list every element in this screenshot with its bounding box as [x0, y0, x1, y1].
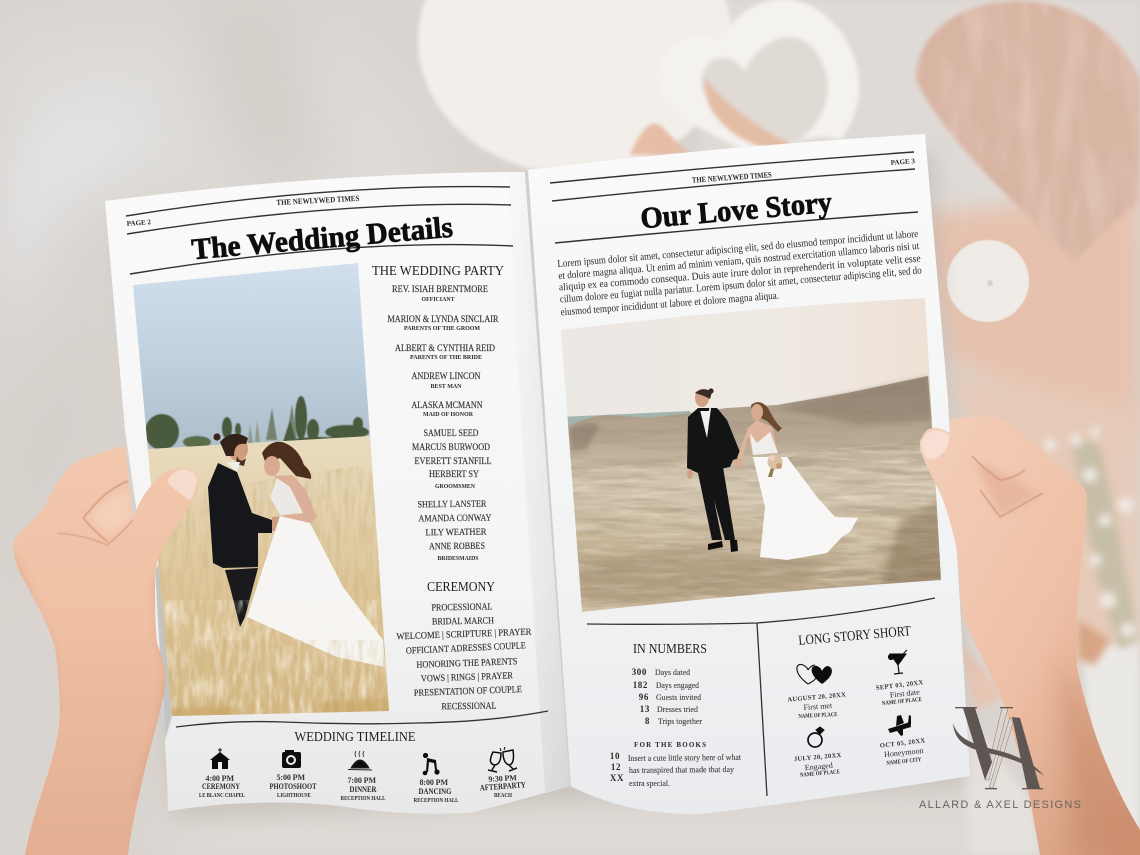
newspaper name: THE NEWLYWED TIMES [692, 170, 773, 185]
story entries: NAME OF PLACE [798, 712, 838, 720]
in numbers section: Days dated [655, 667, 691, 677]
wedding party list: ANDREW LINCON [412, 372, 481, 382]
for the books [610, 741, 742, 788]
groom [687, 388, 742, 552]
title: The Wedding Details [190, 211, 454, 266]
timeline labels: PHOTOSHOOT [270, 781, 317, 791]
story entries: NAME OF CITY [886, 757, 922, 767]
for the books: XX [610, 773, 624, 783]
for the books: has transpired that made that day [629, 764, 735, 775]
ceremony order: CEREMONY [427, 580, 495, 595]
long story short section [787, 624, 926, 779]
bride [247, 442, 385, 667]
timeline labels: AFTERPARTY [479, 779, 526, 793]
right page masthead [550, 152, 922, 318]
wedding party list [372, 264, 504, 562]
panel: open newspaper [105, 134, 970, 820]
story entries: AUGUST 20, 20XX [787, 691, 847, 704]
timeline labels: CEREMONY [202, 781, 240, 791]
wedding party list: THE WEDDING PARTY [372, 264, 504, 279]
timeline labels: 9:30 PM [488, 773, 518, 784]
photo: couple on dunes [555, 290, 945, 620]
wedding timeline [176, 711, 548, 804]
story entries: NAME OF PLACE [800, 769, 840, 779]
newspaper name: THE NEWLYWED TIMES [276, 194, 360, 207]
in numbers section: Guests invited [656, 692, 702, 702]
wedding party list: SAMUEL SEED [424, 429, 479, 439]
wedding party list: MARION & LYNDA SINCLAIR [388, 315, 499, 325]
icon: toasting glasses [488, 747, 517, 772]
wheat foreground [164, 600, 388, 716]
photo: couple in wheat field [133, 263, 389, 716]
wedding party list: PARENTS OF THE BRIDE [410, 355, 482, 361]
icon: chapel [210, 748, 230, 769]
wedding party list: ANNE ROBBES [429, 542, 485, 552]
timeline labels: DINNER [350, 784, 377, 794]
wedding party list: ALBERT & CYNTHIA REID [395, 344, 495, 354]
icon: covered dish [348, 751, 372, 770]
treeline [145, 396, 369, 450]
ceremony order: WELCOME | SCRIPTURE | PRAYER [396, 628, 532, 642]
in numbers section: 300 [632, 667, 647, 677]
in numbers section: 182 [633, 680, 648, 690]
decor: white plate [418, 0, 732, 174]
decor: round candle [947, 240, 1029, 322]
page shadow [120, 150, 965, 820]
timeline labels: 5:00 PM [276, 773, 306, 782]
in numbers section: Days engaged [656, 680, 700, 690]
for the books: 10 [610, 751, 620, 761]
title: Our Love Story [639, 186, 833, 235]
in numbers section: IN NUMBERS [633, 642, 707, 657]
logo: VA monogram [919, 707, 1081, 811]
right hand holding page [900, 410, 1140, 855]
page strip shadow near thumb [155, 560, 172, 740]
thumbnail [921, 430, 950, 459]
in numbers section: 96 [639, 692, 649, 702]
page number: PAGE 2 [127, 218, 152, 228]
wedding party list: REV. ISIAH BRENTMORE [392, 285, 488, 295]
in numbers section: Dresses tried [657, 704, 699, 714]
intro paragraph [557, 229, 922, 318]
timeline labels: LE BLANC CHAPEL [199, 793, 245, 799]
in numbers section: Trips together [658, 716, 702, 726]
timeline labels: 4:00 PM [206, 774, 234, 783]
icon: two hearts [797, 664, 832, 684]
wedding party list: AMANDA CONWAY [418, 514, 492, 524]
wedding party list: LILY WEATHER [425, 528, 487, 538]
story entries: NAME OF PLACE [882, 697, 922, 707]
wedding timeline: WEDDING TIMELINE [294, 730, 416, 745]
intro paragraph: Lorem ipsum dolor sit amet, consectetur adipiscing elit, sed do eiusmod tempor incididunt ut labore [557, 229, 919, 270]
story entries: First met [803, 701, 833, 712]
decor: heart frame [630, 0, 859, 158]
icon: airplane [888, 715, 911, 736]
for the books: Insert a cute little story here of what [628, 752, 742, 763]
groom [208, 433, 280, 627]
for the books: 12 [611, 762, 621, 772]
timeline labels: BEACH [494, 793, 512, 799]
bride [737, 402, 858, 560]
in numbers section: 8 [645, 716, 650, 726]
story entries: JULY 20, 20XX [794, 752, 842, 763]
thumbnail [167, 469, 197, 500]
wedding party list: MARCUS BURWOOD [412, 443, 490, 453]
wedding party list: SHELLY LANSTER [417, 500, 487, 510]
left page masthead [126, 187, 513, 274]
page number: PAGE 3 [891, 157, 916, 167]
icon: camera [282, 750, 301, 768]
icon: music notes [423, 753, 440, 775]
story entries: Honeymoon [884, 746, 924, 759]
wedding party list: MAID OF HONOR [423, 412, 474, 418]
wedding party list: EVERETT STANFILL [414, 457, 492, 467]
intro paragraph: cillum dolore eu fugiat nulla pariatur. Lorem ipsum dolor sit amet, consectetur adipiscing elit, sed do [559, 265, 922, 306]
story entries: First date [889, 687, 921, 700]
ceremony order: PROCESSIONAL [431, 602, 493, 614]
in numbers section [587, 598, 935, 796]
icon: ring [808, 727, 824, 747]
long story short section: LONG STORY SHORT [798, 624, 912, 649]
logo wordmark: ALLARD & AXEL DESIGNS [919, 799, 1081, 811]
timeline labels: DANCING [418, 786, 452, 796]
for the books: extra special. [629, 778, 670, 788]
ceremony order: PRESENTATION OF COUPLE [414, 685, 522, 699]
intro paragraph: et dolore magna aliqua. Ut enim ad minim veniam, quis nostrud exercitation ullamco laboris nisi ut [558, 241, 920, 282]
decor: glitter fabric cone [916, 1, 1140, 262]
left page sheet [105, 172, 570, 814]
wedding party list: GROOMSMEN [435, 484, 476, 490]
wedding party list: HERBERT SY [429, 470, 479, 480]
wedding party list: BRIDESMAIDS [438, 556, 479, 562]
timeline labels: RECEPTION HALL [414, 798, 458, 804]
story entries: SEPT 03, 20XX [876, 679, 924, 692]
icon: cocktail glass [888, 650, 907, 674]
wedding party list: OFFICIANT [422, 297, 454, 303]
intro paragraph: aliquip ex ea commodo consequa. Duis aute irure dolor in reprehenderit in voluptate velit esse [558, 253, 921, 294]
ceremony order: OFFICIANT ADRESSES COUPLE [406, 641, 526, 657]
story entries [787, 679, 926, 779]
ceremony order [396, 580, 532, 712]
wedding party list: PARENTS OF THE GROOM [404, 326, 480, 332]
timeline labels: 8:00 PM [420, 778, 448, 787]
left hand holding page [13, 446, 198, 855]
for the books: FOR THE BOOKS [634, 741, 706, 749]
ceremony order: VOWS | RINGS | PRAYER [421, 671, 514, 685]
timeline labels: RECEPTION HALL [340, 796, 386, 802]
spine shading [505, 172, 570, 792]
masthead rules [550, 152, 918, 243]
wedding party list: BEST MAN [430, 384, 462, 390]
timeline labels: 7:00 PM [348, 776, 376, 785]
intro paragraph: eiusmod tempor incididunt ut labore et dolore magna aliqua. [560, 291, 779, 318]
in numbers section: 13 [640, 704, 650, 714]
ceremony order: RECESSIONAL [441, 702, 497, 712]
ceremony order: BRIDAL MARCH [432, 616, 494, 628]
masthead rules [126, 187, 513, 274]
timeline labels [199, 773, 526, 804]
story entries: OCT 05, 20XX [880, 737, 926, 750]
ceremony order: HONORING THE PARENTS [416, 657, 518, 671]
timeline labels: LIGHTHOUSE [277, 793, 311, 799]
right page sheet [527, 134, 970, 814]
story entries: Engaged [804, 761, 833, 772]
wedding party list: ALASKA MCMANN [412, 401, 483, 411]
decor: right side fabric and flowers [700, 0, 1140, 855]
